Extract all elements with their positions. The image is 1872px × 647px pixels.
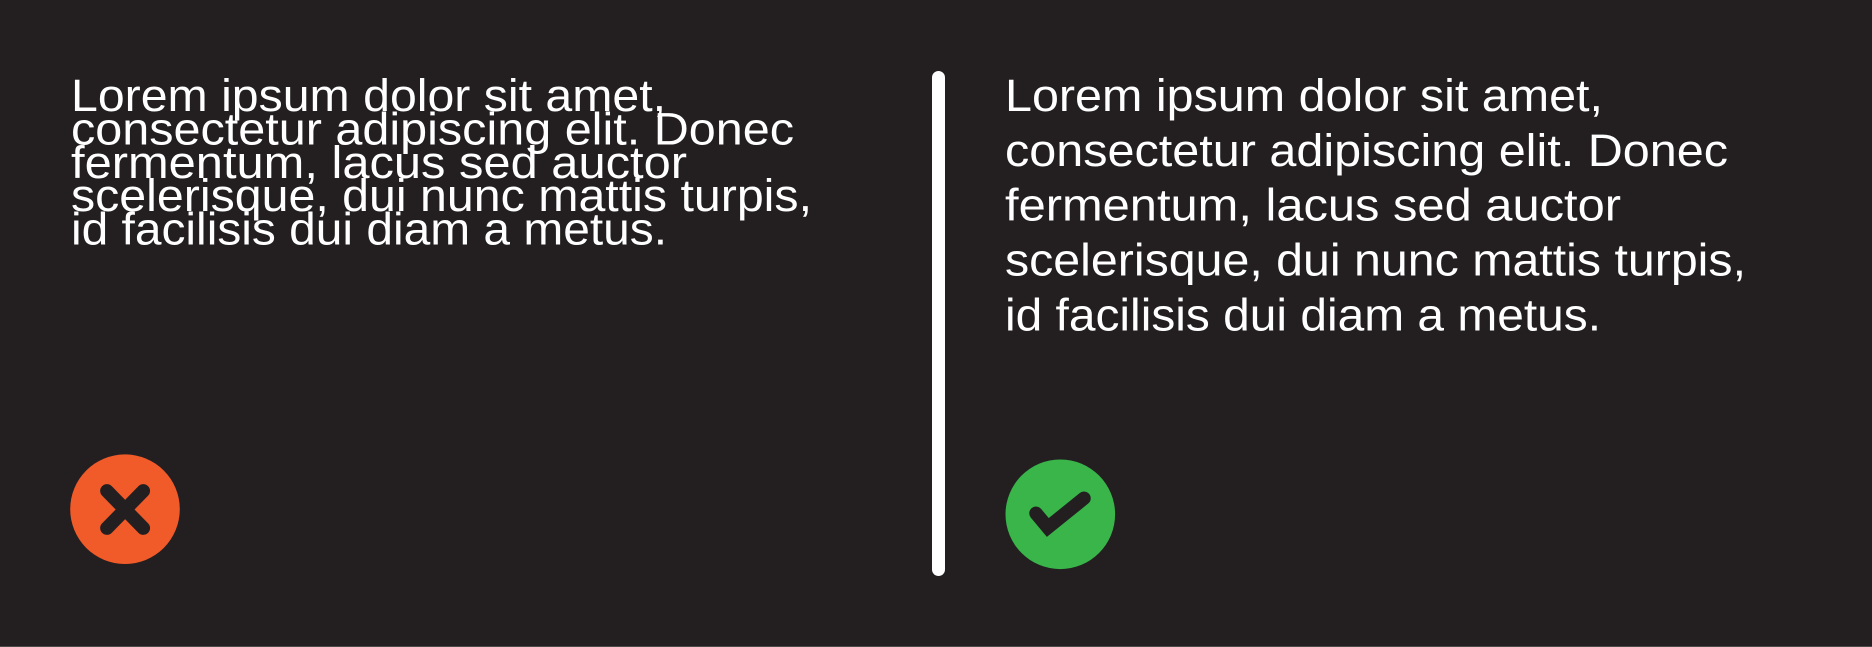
text block: tight line spacing: id facilisis dui diam a metus. (71, 203, 667, 254)
icon: green check mark (1006, 460, 1115, 569)
text block: comfortable line spacing: fermentum, lacus sed auctor (1005, 180, 1621, 231)
text block: tight line spacing: consectetur adipiscing elit. Donec (71, 103, 794, 154)
text block: comfortable line spacing (1005, 70, 1746, 341)
vertical divider (932, 71, 945, 576)
text block: tight line spacing: scelerisque, dui nunc mattis turpis, (71, 170, 812, 221)
text block: comfortable line spacing: scelerisque, dui nunc mattis turpis, (1005, 235, 1746, 286)
icon: orange cross (70, 454, 180, 564)
text block: tight line spacing (71, 70, 812, 254)
text block: comfortable line spacing: Lorem ipsum dolor sit amet, (1005, 70, 1603, 121)
text block: comfortable line spacing: consectetur adipiscing elit. Donec (1005, 125, 1728, 176)
text block: comfortable line spacing: id facilisis dui diam a metus. (1005, 290, 1601, 341)
text block: tight line spacing: Lorem ipsum dolor sit amet, (71, 70, 666, 121)
text block: tight line spacing: fermentum, lacus sed auctor (71, 137, 687, 188)
